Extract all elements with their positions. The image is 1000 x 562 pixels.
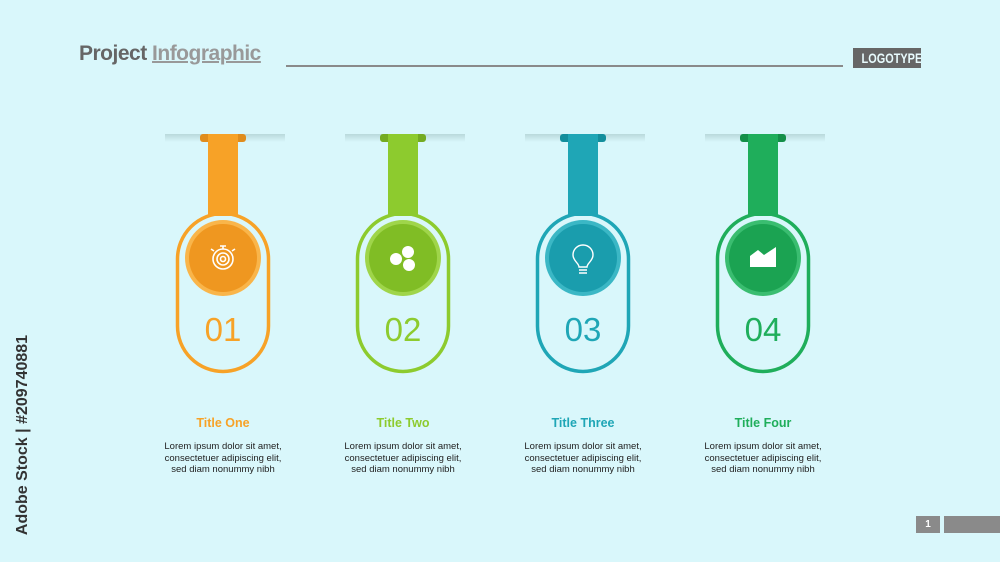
title: Project Infographic: [79, 42, 261, 65]
text three: sed diam nonummy nibh: [531, 464, 635, 475]
title four: Title Four: [735, 416, 791, 430]
text four: sed diam nonummy nibh: [711, 464, 815, 475]
text two: sed diam nonummy nibh: [351, 464, 455, 475]
icon: light bulb: [573, 245, 593, 273]
page number: 1: [925, 519, 931, 530]
title one: Title One: [196, 416, 250, 430]
title three: Title Three: [552, 416, 614, 430]
watermark id: Adobe Stock | #209740881: [14, 335, 31, 535]
text three: consectetuer adipiscing elit,: [525, 452, 641, 464]
icon: chart: [750, 247, 776, 267]
card 4: 04: [745, 311, 781, 348]
logotype: [853, 48, 921, 68]
text one: [164, 441, 282, 475]
card 1: 01: [205, 311, 241, 348]
text one: Lorem ipsum dolor sit amet,: [164, 441, 282, 452]
text three: Lorem ipsum dolor sit amet,: [524, 441, 642, 452]
footer bar: [944, 516, 1000, 533]
card 3: 03: [565, 311, 601, 348]
text two: [344, 441, 462, 475]
card 3: [525, 134, 645, 372]
title two: Title Two: [376, 416, 430, 430]
text three: [524, 441, 642, 475]
card 1: [165, 134, 285, 372]
icon: speech bubbles: [390, 246, 415, 271]
text four: [704, 441, 822, 475]
page number: [916, 516, 940, 533]
card 2: 02: [385, 311, 421, 348]
card 4: [705, 134, 825, 372]
text four: Lorem ipsum dolor sit amet,: [704, 441, 822, 452]
text two: Lorem ipsum dolor sit amet,: [344, 441, 462, 452]
icon: stopwatch gear: [211, 246, 235, 269]
card 2: [345, 134, 465, 372]
header rule: [286, 65, 843, 67]
text one: sed diam nonummy nibh: [171, 464, 275, 475]
text one: consectetuer adipiscing elit,: [165, 452, 281, 464]
text four: consectetuer adipiscing elit,: [705, 452, 821, 464]
logotype: LOGOTYPE: [862, 50, 921, 66]
text two: consectetuer adipiscing elit,: [345, 452, 461, 464]
